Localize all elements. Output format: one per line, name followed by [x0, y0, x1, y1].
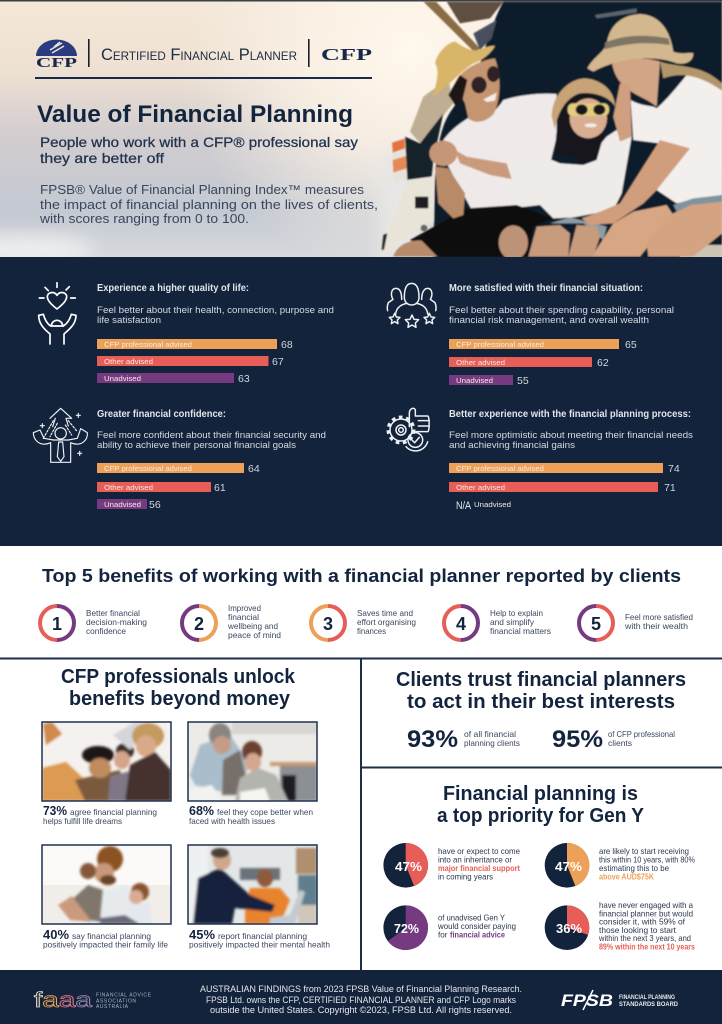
- caption: positively impacted their family life: [43, 940, 168, 950]
- icon: heart and raised arms: [39, 283, 76, 344]
- card: health issues: [188, 722, 317, 826]
- icon: confident person with arrow: [33, 408, 87, 462]
- description: have or expect to come: [438, 846, 520, 856]
- description: estimating this to be: [599, 863, 669, 873]
- description: ability to achieve their personal financial goals: [97, 440, 296, 450]
- benefit 1: Better financial: [86, 609, 140, 618]
- heading: a top priority for Gen Y: [437, 805, 645, 827]
- caption: positively impacted their mental health: [189, 940, 330, 950]
- description: 89% within the next 10 years: [599, 942, 695, 952]
- stat: all clients: planning clients: [464, 739, 520, 748]
- photo: couple reviewing paperwork: [188, 722, 317, 801]
- photo: colleagues at a laptop: [188, 845, 317, 924]
- description: would consider paying: [437, 921, 516, 931]
- bar chart: Other advised: [104, 357, 153, 366]
- heading: Better experience with the financial planning process:: [449, 409, 691, 420]
- heading: Clients trust financial planners: [396, 669, 686, 691]
- subtitle: [40, 135, 358, 166]
- benefit 1: [40, 606, 147, 640]
- bar chart: [449, 463, 680, 512]
- benefit 2: peace of mind: [228, 631, 281, 640]
- heading: Experience a higher quality of life:: [97, 283, 249, 294]
- heading: Top 5 benefits of working with a financial planner reported by clients: [42, 565, 681, 586]
- heading: [61, 666, 296, 710]
- panel: Gen Y priority: [383, 783, 695, 952]
- description: of unadvised Gen Y: [438, 912, 505, 922]
- heading: to act in their best interests: [407, 691, 675, 713]
- description: Feel better about their health, connection, purpose and: [97, 305, 334, 315]
- footer: [0, 970, 722, 1024]
- photo: father with children: [42, 845, 171, 924]
- bar chart: 67: [272, 356, 284, 368]
- benefit 2: 2: [194, 614, 204, 634]
- legal text: FPSB Ltd. owns the CFP, CERTIFIED FINANCIAL PLANNER and CFP Logo marks: [206, 995, 516, 1005]
- benefit 3: finances: [357, 627, 386, 636]
- stat: CFP clients: of CFP professional: [608, 730, 675, 739]
- heading: More satisfied with their financial situation:: [449, 283, 643, 294]
- intro text: the impact of financial planning on the lives of clients,: [40, 198, 378, 212]
- stat: CFP clients: 95%: [552, 726, 603, 753]
- subtitle: People who work with a CFP® professional say: [40, 135, 358, 150]
- bar chart: Unadvised: [456, 376, 493, 385]
- description: Feel better about their spending capability, personal: [449, 305, 674, 315]
- benefit 5: [579, 606, 693, 640]
- man: [443, 94, 557, 213]
- description: [437, 912, 516, 940]
- heading: benefits beyond money: [69, 688, 291, 710]
- stat: inheritance: [383, 843, 520, 888]
- legal text: outside the United States. Copyright ©2023, FPSB Ltd. All rights reserved.: [210, 1005, 512, 1015]
- bar chart: Other advised: [104, 483, 153, 492]
- logo: CFP certification mark lockup: [36, 39, 372, 71]
- pie chart 36%: [545, 905, 589, 950]
- pie chart 36%: 36%: [556, 921, 582, 936]
- bar chart: 68: [281, 339, 293, 351]
- logo: FPSB: FPSB: [561, 991, 613, 1010]
- bar chart: 55: [517, 375, 529, 387]
- bar chart: 63: [238, 373, 250, 385]
- heading: Greater financial confidence:: [97, 409, 226, 420]
- logo: FPSB: [561, 990, 678, 1010]
- pie chart 47%: 47%: [555, 859, 582, 874]
- card: family life: [42, 845, 171, 950]
- description: have never engaged with a: [599, 900, 693, 910]
- stat: would pay for advice: [383, 905, 516, 950]
- logo: FAAA: faaa: [34, 989, 92, 1012]
- bar chart: CFP professional advised: [456, 464, 544, 473]
- stat: receiving within 10 years: [545, 843, 695, 888]
- description: Feel more optimistic about meeting their financial needs: [449, 430, 693, 440]
- description: this within 10 years, with 80%: [599, 854, 695, 864]
- description: [598, 900, 695, 952]
- panel: index scores: [0, 257, 722, 546]
- caption: [189, 804, 313, 826]
- logo: FPSB: STANDARDS BOARD: [619, 1001, 678, 1008]
- bar chart: 74: [668, 463, 680, 475]
- caption: agree financial planning: [70, 808, 157, 817]
- heading: [396, 669, 686, 713]
- legal text: [200, 984, 522, 1015]
- stat: never engaged: [545, 900, 695, 952]
- description: within the next 3 years, and: [598, 933, 691, 943]
- stat: all clients: 93%: [407, 726, 458, 753]
- pie chart 47%: [545, 843, 589, 888]
- caption: [189, 928, 330, 950]
- stat: CFP clients: [552, 726, 675, 753]
- heading: CFP professionals unlock: [61, 666, 296, 688]
- bar chart: Other advised: [456, 483, 505, 492]
- description: above AUD$75K: [599, 872, 654, 882]
- logo: FPSB: FINANCIAL PLANNING: [619, 994, 675, 1001]
- legal text: AUSTRALIAN FINDINGS from 2023 FPSB Value of Financial Planning Research.: [200, 984, 522, 994]
- benefit 2: wellbeing and: [227, 622, 278, 631]
- photo: laughing friends: [42, 722, 171, 801]
- bar chart: Unadvised: [104, 500, 141, 509]
- bar chart: CFP professional advised: [104, 464, 192, 473]
- description: life satisfaction: [97, 315, 161, 325]
- bar chart: CFP professional advised: [104, 340, 192, 349]
- description: are likely to start receiving: [599, 846, 689, 856]
- bar chart: Unadvised: [474, 500, 511, 509]
- description: major financial support: [438, 863, 520, 873]
- logo: FAAA: AUSTRALIA: [96, 1004, 129, 1010]
- subtitle: they are better off: [40, 151, 164, 166]
- heading: [437, 783, 645, 827]
- caption: say financial planning: [72, 932, 151, 941]
- bar chart: Unadvised: [104, 374, 141, 383]
- caption: feel they cope better when: [217, 808, 313, 817]
- benefit 4: [444, 606, 551, 640]
- logo: CFP certification mark lockup: CFP: [321, 45, 372, 64]
- benefit 2: financial: [228, 613, 259, 622]
- logo: FAAA: [34, 989, 152, 1012]
- description: and achieving financial gains: [449, 440, 575, 450]
- description: for: [438, 930, 448, 940]
- caption: 68%: [189, 804, 214, 818]
- caption: 73%: [43, 804, 67, 818]
- block: planning process: [388, 408, 693, 512]
- benefit 2: Improved: [228, 604, 261, 613]
- description: [97, 430, 326, 450]
- bar chart: [449, 339, 637, 387]
- panel: benefits beyond money: [42, 666, 330, 950]
- stat: all clients: of all financial: [464, 730, 516, 739]
- benefit 1: decision-making: [86, 618, 147, 627]
- icon: gear, thumb and tick: [388, 408, 429, 451]
- panel: client trust: [396, 669, 686, 753]
- intro text: FPSB® Value of Financial Planning Index™ measures: [40, 183, 364, 197]
- description: [449, 430, 693, 450]
- pie chart 72%: 72%: [394, 921, 419, 936]
- description: financial risk management, and overall wealth: [449, 315, 649, 325]
- benefit 3: 3: [323, 614, 333, 634]
- caption: helps fulfill life dreams: [43, 817, 122, 826]
- description: [599, 846, 695, 882]
- caption: faced with health issues: [189, 817, 275, 826]
- hero photo: family in car boot: [0, 0, 722, 264]
- description: [438, 846, 520, 882]
- bar chart: N/A: [456, 500, 472, 512]
- pie chart 47%: 47%: [395, 859, 422, 874]
- benefit 3: [311, 606, 416, 640]
- benefit 4: and simplify: [490, 618, 535, 627]
- woman: [631, 75, 722, 203]
- bar chart: Other advised: [456, 358, 505, 367]
- card: mental health: [188, 845, 330, 950]
- benefit 2: [182, 604, 281, 640]
- description: those looking to start: [599, 925, 677, 935]
- block: financial situation: [387, 283, 674, 387]
- caption: report financial planning: [218, 932, 307, 941]
- caption: 40%: [43, 928, 69, 942]
- description: financial planner but would: [599, 908, 693, 918]
- card: life dreams: [42, 722, 171, 826]
- description: [449, 305, 674, 325]
- benefit 3: Saves time and: [357, 609, 413, 618]
- benefit 3: effort organising: [357, 618, 416, 627]
- block: quality of life: [39, 283, 334, 385]
- bar chart: 56: [149, 499, 161, 511]
- logo: FAAA: FINANCIAL ADVICE: [96, 992, 152, 998]
- bar chart: 65: [625, 339, 637, 351]
- logo: CFP certification mark lockup: CFP: [36, 56, 78, 71]
- benefit 4: Help to explain: [490, 609, 543, 618]
- benefit 4: 4: [456, 614, 466, 634]
- heading: Financial planning is: [443, 783, 638, 805]
- bar chart: CFP professional advised: [456, 340, 544, 349]
- benefit 5: with their wealth: [624, 622, 688, 631]
- benefit 5: 5: [591, 614, 601, 634]
- bar chart: 62: [597, 357, 609, 369]
- title: Value of Financial Planning: [37, 101, 353, 128]
- car: [433, 2, 722, 258]
- description: [97, 305, 334, 325]
- block: financial confidence: [33, 408, 326, 511]
- bar chart: 71: [664, 482, 676, 494]
- description: into an inheritance or: [438, 854, 512, 864]
- description: in coming years: [438, 872, 493, 882]
- benefit 1: confidence: [86, 627, 126, 636]
- bar chart: 61: [214, 482, 226, 494]
- description: consider it, with 59% of: [599, 916, 686, 926]
- panel: top 5 benefits: [40, 565, 693, 640]
- benefit 5: Feel more satisfied: [625, 613, 693, 622]
- benefit 4: financial matters: [490, 627, 551, 636]
- benefit 1: 1: [52, 614, 62, 634]
- description: Feel more confident about their financial security and: [97, 430, 326, 440]
- bar chart: 64: [248, 463, 260, 475]
- description: financial advice: [450, 930, 505, 940]
- logo: FAAA: ASSOCIATION: [96, 998, 136, 1004]
- bar chart: [97, 339, 293, 385]
- logo: CFP certification mark lockup: Certified Financial Planner: [101, 45, 297, 64]
- intro text: with scores ranging from 0 to 100.: [39, 212, 249, 226]
- caption: [43, 928, 168, 950]
- caption: 45%: [189, 928, 215, 942]
- stat: CFP clients: clients: [608, 739, 632, 748]
- child: [539, 129, 632, 220]
- panel: header hero: [0, 0, 722, 264]
- stat: all clients: [407, 726, 520, 753]
- intro text: [39, 183, 378, 226]
- bar chart: [97, 463, 260, 511]
- caption: [43, 804, 157, 826]
- icon: people and stars: [387, 283, 436, 327]
